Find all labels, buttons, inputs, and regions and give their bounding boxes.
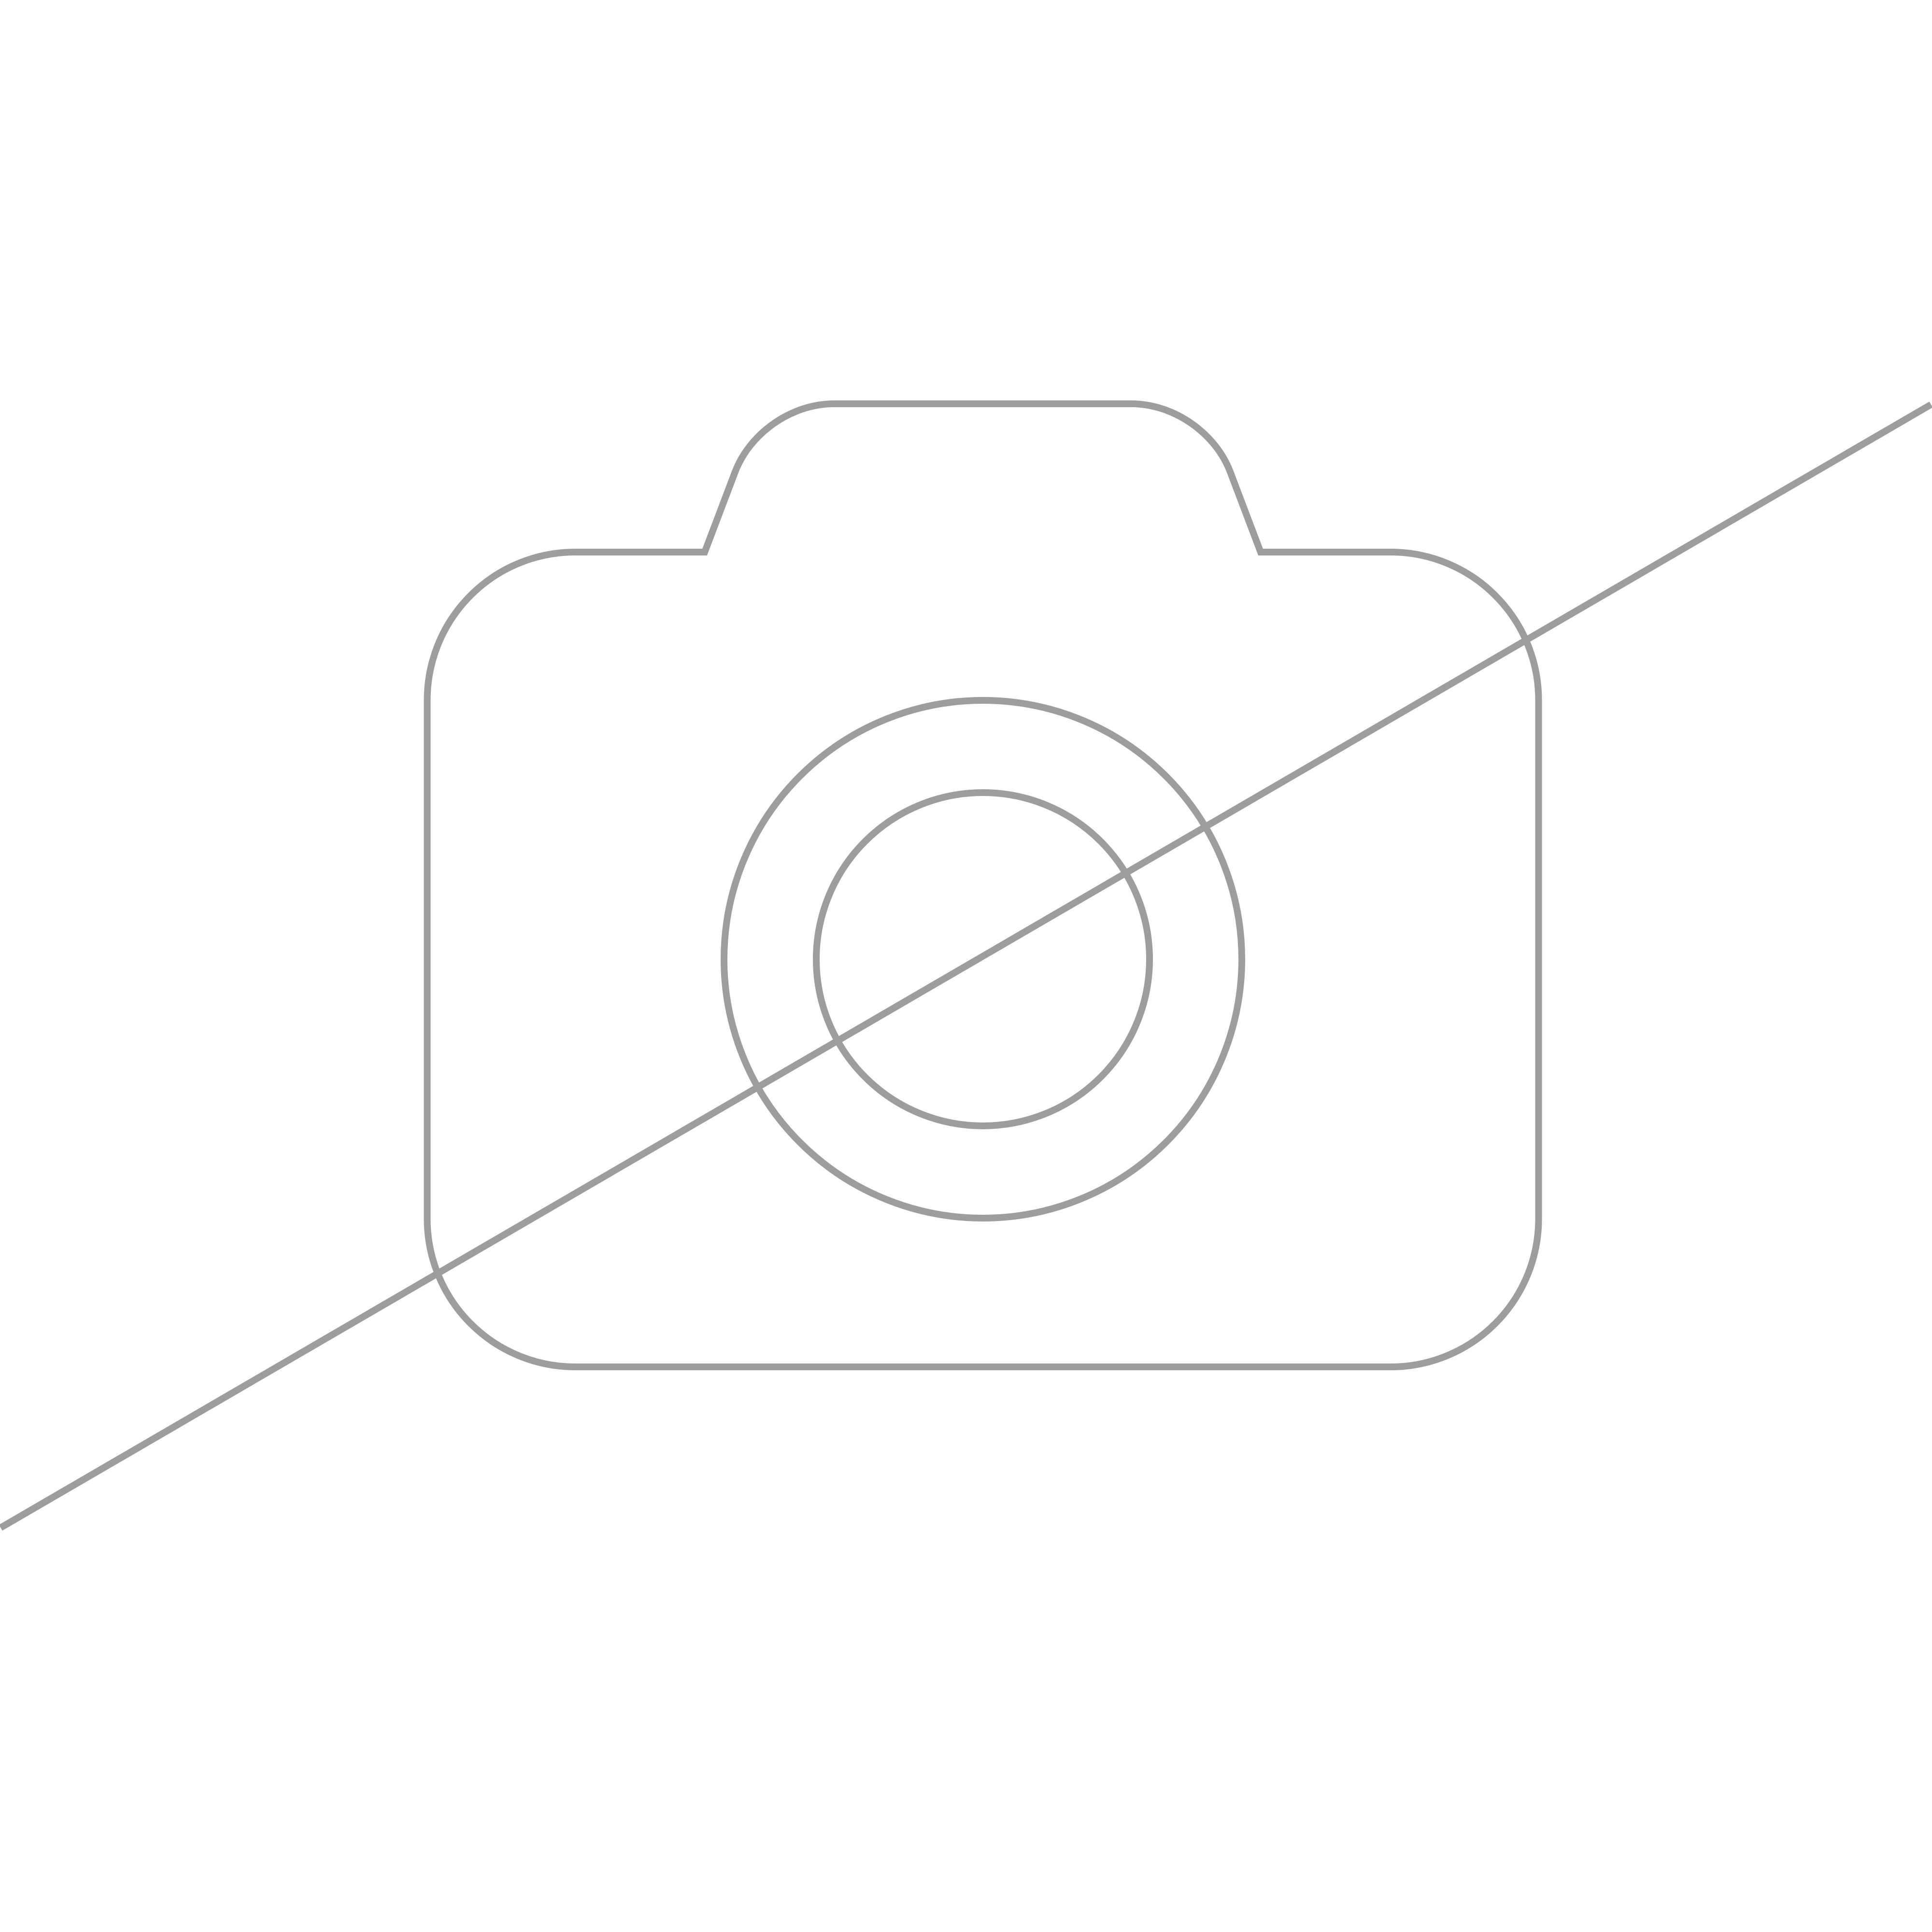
camera body outline: [427, 404, 1539, 1367]
camera lens inner ring: [816, 793, 1150, 1126]
diagonal strike-through line: [0, 405, 1931, 1528]
camera lens outer ring: [724, 700, 1242, 1218]
